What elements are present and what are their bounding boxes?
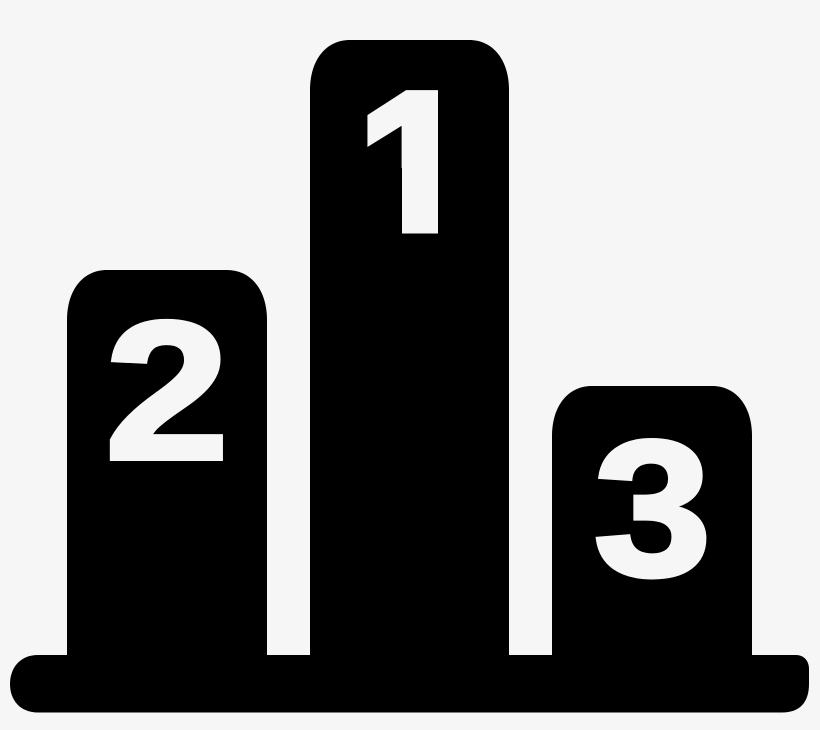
second place column [67,270,267,660]
base bar [10,655,809,712]
number 2: 2 [105,280,229,501]
number 1: 1 [357,49,473,280]
number 3: 3 [593,400,712,616]
third place column [552,386,752,660]
first place column [310,40,509,660]
